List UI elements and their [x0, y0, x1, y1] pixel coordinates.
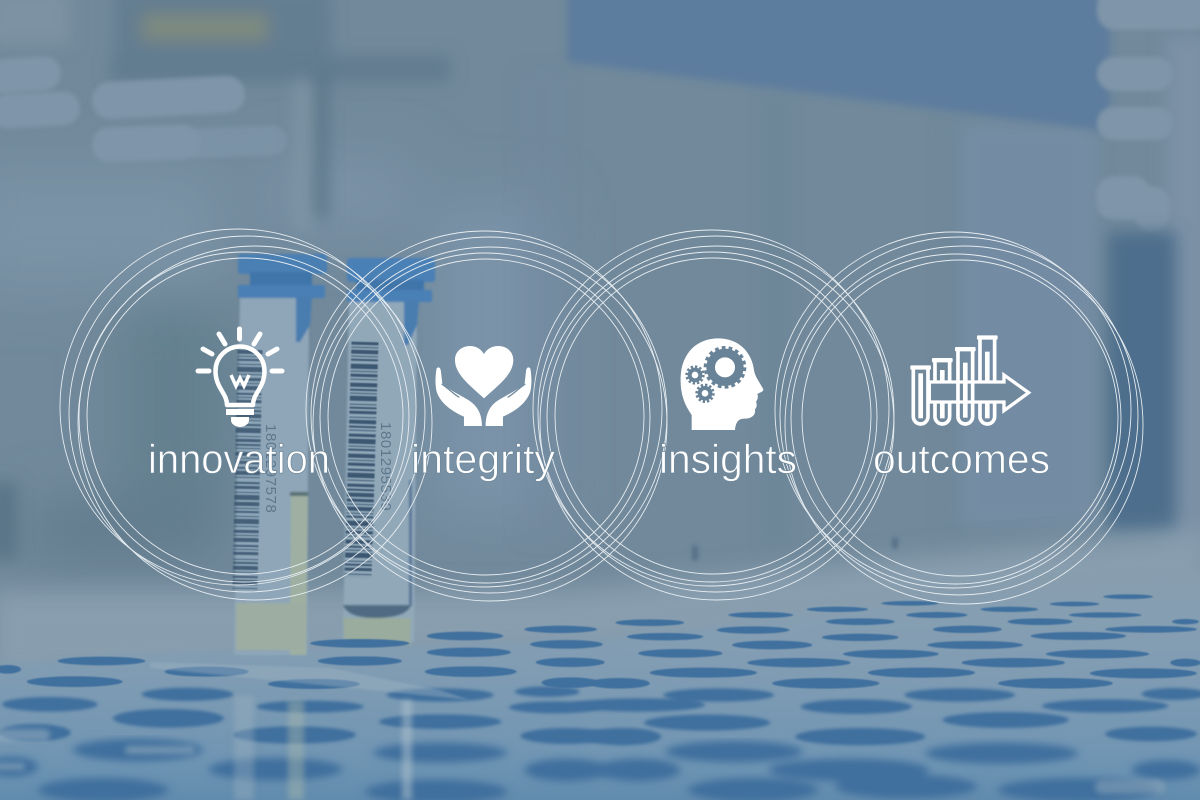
ring cluster 2 — [306, 231, 667, 601]
label: insights: insights — [659, 436, 797, 482]
ring cluster 4 — [775, 232, 1143, 604]
label: integrity: integrity — [411, 436, 555, 482]
label: outcomes: outcomes — [873, 436, 1050, 482]
ring cluster 3 — [533, 230, 894, 600]
test tubes — [234, 254, 435, 655]
background: dark cabinet — [0, 232, 1176, 560]
plate highlights and tube reflections — [0, 696, 1165, 800]
barcode number 2: 1801295539 — [377, 422, 394, 511]
ring cluster 1 — [60, 229, 432, 600]
microplate wells, right half — [571, 594, 1200, 800]
label: innovation: innovation — [148, 436, 330, 482]
background: light blurred blobs — [0, 0, 1200, 232]
icon: heart in hands — [436, 346, 531, 426]
background: blue ceiling band — [567, 0, 1110, 132]
barcode 2 — [358, 342, 365, 577]
microplate wells, left half — [0, 626, 612, 800]
background: bench — [0, 530, 1200, 680]
icon: light bulb — [198, 329, 282, 427]
icon: head with gears — [681, 338, 763, 430]
plate rim — [150, 662, 470, 700]
barcode 1 — [245, 350, 250, 590]
barcode number 1: 1801297578 — [262, 424, 279, 513]
icon: test tubes with arrow — [910, 335, 1029, 424]
background: blurred dark dots — [692, 537, 898, 561]
